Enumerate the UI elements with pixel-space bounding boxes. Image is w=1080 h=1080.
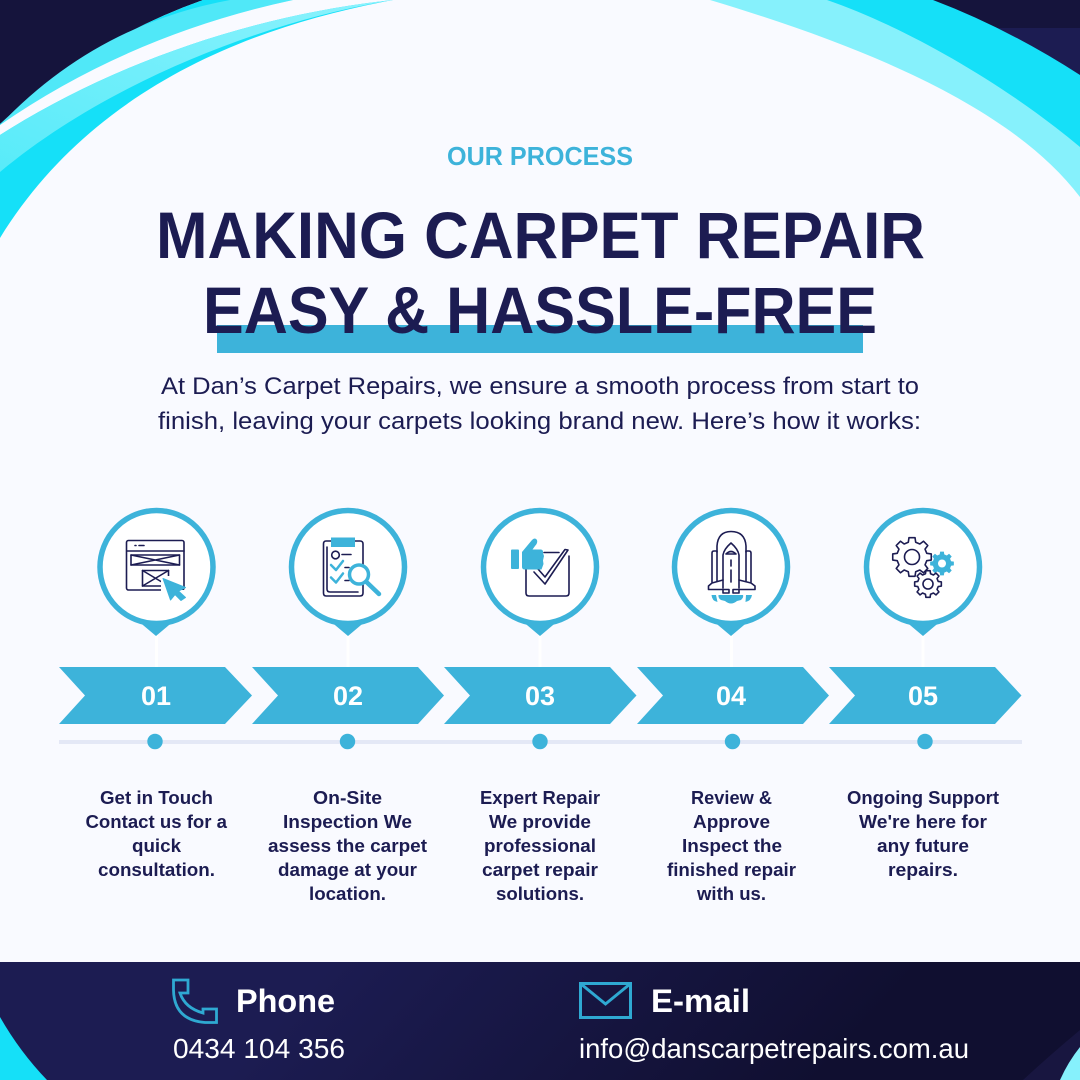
step 1 text: consultation.: [98, 860, 215, 880]
step 3 text: Expert Repair: [480, 788, 600, 808]
step 1 text: [86, 788, 228, 880]
step 4 arrow banner: 04: [716, 681, 746, 711]
icon: phone: [174, 980, 216, 1022]
icon: thumbs up with checkbox: [511, 538, 569, 596]
title with highlight bar: MAKING CARPET REPAIR: [156, 198, 925, 272]
timeline with dots: [59, 734, 1022, 749]
step 2 text: On-Site: [313, 788, 382, 808]
step 4 text: Inspect the: [682, 836, 782, 856]
step 4 text: Approve: [693, 812, 770, 832]
step 4 text: Review &: [691, 788, 772, 808]
background swoosh: top right: [710, 0, 1080, 197]
step 4 pin: [674, 510, 788, 636]
step 5 text: any future: [877, 836, 969, 856]
step 1 text: quick: [132, 836, 182, 856]
step 1 text: Get in Touch: [100, 788, 213, 808]
step 4 arrow banner: [637, 667, 829, 724]
step 2 text: location.: [309, 884, 386, 904]
eyebrow: our process: OUR PROCESS: [447, 141, 633, 171]
step 4 text: [667, 788, 796, 904]
step 3 text: carpet repair: [482, 860, 598, 880]
email address: info@danscarpetrepairs.com.au: [579, 1033, 969, 1064]
icon: checklist with magnifier: [324, 538, 379, 596]
step 2 text: damage at your: [278, 860, 417, 880]
step 5 text: We're here for: [859, 812, 987, 832]
step 2 arrow banner: [252, 667, 444, 724]
step 5 text: [847, 788, 999, 880]
step 3 text: professional: [484, 836, 596, 856]
step 3 text: solutions.: [496, 884, 584, 904]
step 5 text: Ongoing Support: [847, 788, 999, 808]
step 5 arrow banner: 05: [908, 681, 938, 711]
icon: space shuttle: [708, 532, 755, 604]
step 5 text: repairs.: [888, 860, 958, 880]
intro paragraph: [158, 373, 921, 435]
intro paragraph: At Dan’s Carpet Repairs, we ensure a smooth process from start to: [161, 373, 919, 400]
step 2 text: assess the carpet: [268, 836, 427, 856]
step 2 pin: [292, 510, 404, 636]
background swoosh: top left: [0, 0, 393, 238]
step 3 text: [480, 788, 600, 904]
step 2 text: Inspection We: [283, 812, 412, 832]
step 4 text: with us.: [696, 884, 766, 904]
step 4 text: finished repair: [667, 860, 796, 880]
step 1 text: Contact us for a: [86, 812, 228, 832]
step 3 arrow banner: 03: [525, 681, 555, 711]
icon: envelope: [580, 984, 630, 1018]
step 1 arrow banner: [59, 667, 252, 724]
step 2 text: [268, 788, 427, 904]
connector stems: [155, 630, 924, 668]
icon: gears: [893, 538, 954, 597]
phone heading: Phone: [236, 983, 335, 1019]
step 3 arrow banner: [444, 667, 636, 724]
step 3 text: We provide: [489, 812, 591, 832]
phone number: 0434 104 356: [173, 1033, 345, 1064]
step 1 arrow banner: 01: [141, 681, 171, 711]
step 5 arrow banner: [829, 667, 1022, 724]
icon: browser window with cursor: [126, 540, 186, 601]
footer panel: [0, 962, 1080, 1080]
step 5 pin: [866, 510, 980, 636]
title with highlight bar: [156, 198, 925, 353]
step 3 pin: [484, 510, 596, 636]
step 1 pin: [100, 510, 213, 636]
step 2 arrow banner: 02: [333, 681, 363, 711]
intro paragraph: finish, leaving your carpets looking brand new. Here’s how it works:: [158, 408, 921, 435]
title with highlight bar: EASY & HASSLE-FREE: [203, 273, 877, 347]
email heading: E-mail: [651, 983, 750, 1019]
